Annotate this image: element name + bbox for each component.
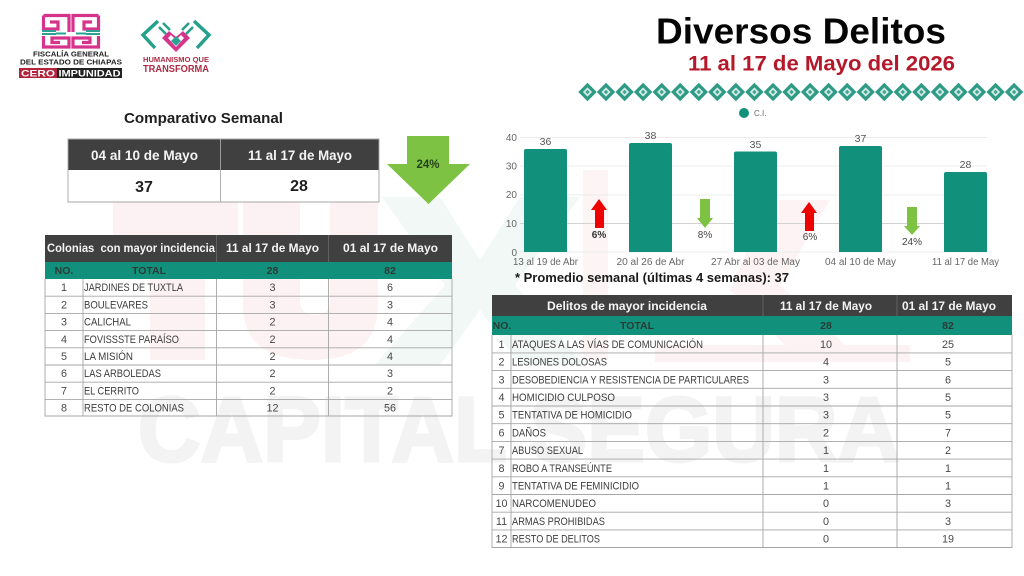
colonias rows: LAS ARBOLEDAS	[84, 368, 161, 380]
colonias total row: TOTAL	[132, 265, 167, 277]
delitos rows: 1	[823, 480, 829, 492]
colonias rows: JARDINES DE TUXTLA	[84, 282, 184, 294]
icon: hands and heart	[143, 21, 209, 52]
colonias rows: 2	[269, 334, 276, 346]
colonias rows: 3	[269, 282, 276, 294]
colonias rows: 3	[387, 368, 393, 380]
colonias rows	[61, 282, 396, 415]
arrow: up 6%: 6%	[592, 230, 606, 241]
delitos rows: 10	[495, 498, 508, 510]
delitos rows: ARMAS PROHIBIDAS	[512, 516, 605, 528]
bar chart: weekly C.I.	[506, 130, 999, 268]
legend: C.I.	[739, 108, 766, 118]
delitos rows: 3	[823, 374, 829, 386]
delitos rows: 1	[945, 463, 951, 475]
delitos rows: 6	[945, 374, 951, 386]
delitos rows: 5	[945, 357, 951, 369]
delitos total row: NO.	[493, 320, 511, 332]
colonias rows: 6	[61, 368, 67, 380]
background watermark	[113, 170, 910, 481]
logo text: Transforma: TRANSFORMA	[143, 63, 209, 75]
logo text: Fiscalía General: FISCALÍA GENERAL	[33, 50, 110, 58]
delitos rows: 7	[498, 445, 505, 457]
delitos rows: 2	[823, 427, 829, 439]
delitos header row	[492, 295, 1012, 316]
delitos total row: 82	[942, 320, 954, 332]
delitos rows: 11	[496, 516, 507, 528]
bar value labels: 28	[960, 159, 971, 171]
colonias header row: 01 al 17 de Mayo	[343, 243, 438, 255]
colonias rows: 5	[61, 351, 67, 363]
y axis labels: 0	[511, 248, 517, 259]
value: current week: 28	[290, 178, 308, 195]
colonias rows: 2	[269, 317, 276, 329]
legend: C.I.: C.I.	[754, 109, 766, 118]
y axis labels: 40	[506, 133, 517, 144]
delitos rows: 2	[945, 445, 951, 457]
delitos rows: 8	[498, 463, 505, 475]
delitos rows: 0	[823, 498, 829, 510]
logo text: Humanismo que: HUMANISMO QUE	[143, 55, 209, 64]
arrow: weekly decrease 24%	[387, 136, 470, 204]
delitos rows: 7	[945, 427, 951, 439]
delitos rows: 3	[823, 410, 829, 422]
delitos header row: 01 al 17 de Mayo	[902, 301, 996, 313]
colonias rows: 56	[384, 403, 396, 415]
category labels	[513, 257, 999, 268]
delitos rows: LESIONES DOLOSAS	[512, 357, 607, 369]
heading: Comparativo Semanal: Comparativo Semanal	[124, 110, 283, 127]
colonias rows: 4	[387, 351, 393, 363]
bars	[524, 143, 987, 252]
colonias rows: 2	[269, 385, 276, 397]
colonias header row	[45, 235, 452, 262]
arrow: down 24%	[902, 207, 922, 248]
colonias rows: 2	[387, 385, 393, 397]
delitos rows: 1	[823, 463, 829, 475]
colonias header row: Colonias con mayor incidencia	[47, 243, 216, 255]
delitos rows: TENTATIVA DE FEMINICIDIO	[512, 480, 639, 492]
delitos rows: 12	[495, 534, 508, 546]
arrow: down 8%: 8%	[698, 230, 712, 241]
delitos rows: 3	[945, 516, 951, 528]
colonias rows: 12	[266, 403, 279, 415]
colonias rows: 3	[387, 299, 393, 311]
decorative diamond band	[578, 83, 1023, 101]
colonias rows: LA MISIÓN	[84, 350, 133, 363]
delitos rows: 1	[498, 339, 505, 351]
category labels: 04 al 10 de May	[825, 257, 896, 268]
colonias total row: 82	[384, 265, 396, 277]
gridlines	[520, 138, 987, 252]
colonias rows: 6	[387, 282, 393, 294]
delitos rows: 4	[498, 392, 505, 404]
logo badge: Cero Impunidad: CERO	[21, 68, 55, 80]
colonias rows: 8	[61, 403, 67, 415]
colonias grid	[45, 279, 452, 416]
bar value labels: 36	[540, 136, 551, 148]
bar value labels: 37	[855, 133, 866, 145]
delitos rows: 3	[823, 392, 829, 404]
colonias rows: 1	[61, 282, 67, 294]
colonias total row: 28	[267, 265, 278, 277]
colonias rows: RESTO DE COLONIAS	[84, 403, 184, 415]
delitos rows: ROBO A TRANSEÚNTE	[512, 462, 612, 475]
arrow: weekly decrease 24%: 24%	[416, 159, 440, 171]
bar value labels: 35	[750, 139, 761, 151]
colonias rows: 2	[61, 299, 67, 311]
delitos rows: 2	[498, 357, 505, 369]
bar value labels: 38	[645, 130, 656, 142]
title: Diversos Delitos	[656, 10, 946, 52]
delitos rows: 5	[498, 410, 505, 422]
delitos rows: 3	[945, 498, 951, 510]
colonias rows: 2	[269, 351, 276, 363]
background watermark: CAPITAL SEGURA	[138, 379, 900, 481]
delitos rows: 25	[942, 339, 954, 351]
delitos rows: HOMICIDIO CULPOSO	[512, 392, 615, 404]
delitos header row: Delitos de mayor incidencia	[547, 301, 708, 313]
arrow: up 6% second: 6%	[803, 232, 817, 243]
delitos rows: TENTATIVA DE HOMICIDIO	[512, 410, 632, 422]
colonias rows: 4	[387, 317, 393, 329]
category labels: 20 al 26 de Abr	[616, 257, 685, 268]
delitos rows: 9	[498, 480, 505, 492]
logo: Humanismo que Transforma	[143, 21, 209, 75]
note: weekly average: * Promedio semanal (últimas 4 semanas): 37	[515, 270, 789, 285]
colonias rows: BOULEVARES	[84, 299, 148, 311]
arrow: down 24%: 24%	[902, 237, 922, 248]
delitos rows: DAÑOS	[512, 426, 546, 439]
delitos grid	[492, 335, 1012, 548]
subtitle: date range: 11 al 17 de Mayo del 2026	[688, 52, 955, 76]
table: colonias	[45, 235, 452, 416]
delitos rows: ABUSO SEXUAL	[512, 445, 583, 457]
colonias rows: 4	[61, 334, 67, 346]
colonias rows: 4	[387, 334, 393, 346]
y axis labels: 30	[506, 162, 517, 173]
y axis labels	[506, 133, 517, 259]
logo text: Estado de Chiapas: DEL ESTADO DE CHIAPAS	[20, 60, 122, 66]
category labels: 13 al 19 de Abr	[513, 257, 579, 268]
y axis labels: 10	[506, 219, 517, 230]
arrow: down 8%	[697, 199, 713, 241]
delitos rows: 0	[823, 534, 829, 546]
delitos rows: 19	[942, 534, 954, 546]
category labels: 27 Abr al 03 de May	[711, 257, 800, 268]
delitos rows: 10	[820, 339, 832, 351]
colonias rows: 3	[61, 317, 67, 329]
header: current week: 11 al 17 de Mayo	[248, 148, 352, 163]
category labels: 11 al 17 de May	[932, 257, 999, 268]
arrow: up 6%	[591, 199, 607, 241]
delitos rows: 4	[823, 357, 829, 369]
icon: Fiscalía emblem	[42, 16, 100, 47]
colonias total row: NO.	[55, 265, 73, 277]
delitos rows: 1	[945, 480, 951, 492]
delitos rows: 6	[498, 427, 505, 439]
delitos rows: 5	[945, 410, 951, 422]
colonias rows: EL CERRITO	[84, 385, 139, 397]
colonias header row: 11 al 17 de Mayo	[226, 243, 319, 255]
delitos rows: RESTO DE DELITOS	[512, 534, 600, 546]
colonias rows: 7	[61, 385, 67, 397]
value: previous week: 37	[135, 179, 153, 196]
delitos rows: 1	[823, 445, 829, 457]
logo: Fiscalía General	[19, 16, 122, 80]
y axis labels: 20	[506, 190, 517, 201]
arrow: up 6% second	[801, 202, 817, 243]
delitos rows: 3	[498, 374, 505, 386]
delitos rows: ATAQUES A LAS VÍAS DE COMUNICACIÓN	[512, 338, 703, 351]
delitos rows: 0	[823, 516, 829, 528]
colonias rows: FOVISSSTE PARAÍSO	[84, 333, 179, 346]
delitos total row	[492, 316, 1012, 335]
colonias rows: CALICHAL	[84, 317, 131, 329]
delitos rows: 5	[945, 392, 951, 404]
delitos rows	[495, 338, 954, 546]
logo badge: Cero Impunidad	[19, 68, 122, 80]
delitos header row: 11 al 17 de Mayo	[780, 301, 872, 313]
delitos total row: TOTAL	[620, 320, 655, 332]
table: delitos	[492, 295, 1012, 548]
colonias rows: 3	[269, 299, 276, 311]
table: weekly comparison	[68, 139, 379, 202]
bar value labels	[540, 130, 971, 171]
header: previous week: 04 al 10 de Mayo	[91, 148, 198, 163]
delitos total row: 28	[820, 320, 832, 332]
logo badge: Cero Impunidad: IMPUNIDAD	[58, 68, 121, 80]
delitos rows: DESOBEDIENCIA Y RESISTENCIA DE PARTICULARES	[512, 374, 749, 386]
colonias total row	[45, 262, 452, 279]
colonias rows: 2	[269, 368, 276, 380]
delitos rows: NARCOMENUDEO	[512, 498, 596, 510]
